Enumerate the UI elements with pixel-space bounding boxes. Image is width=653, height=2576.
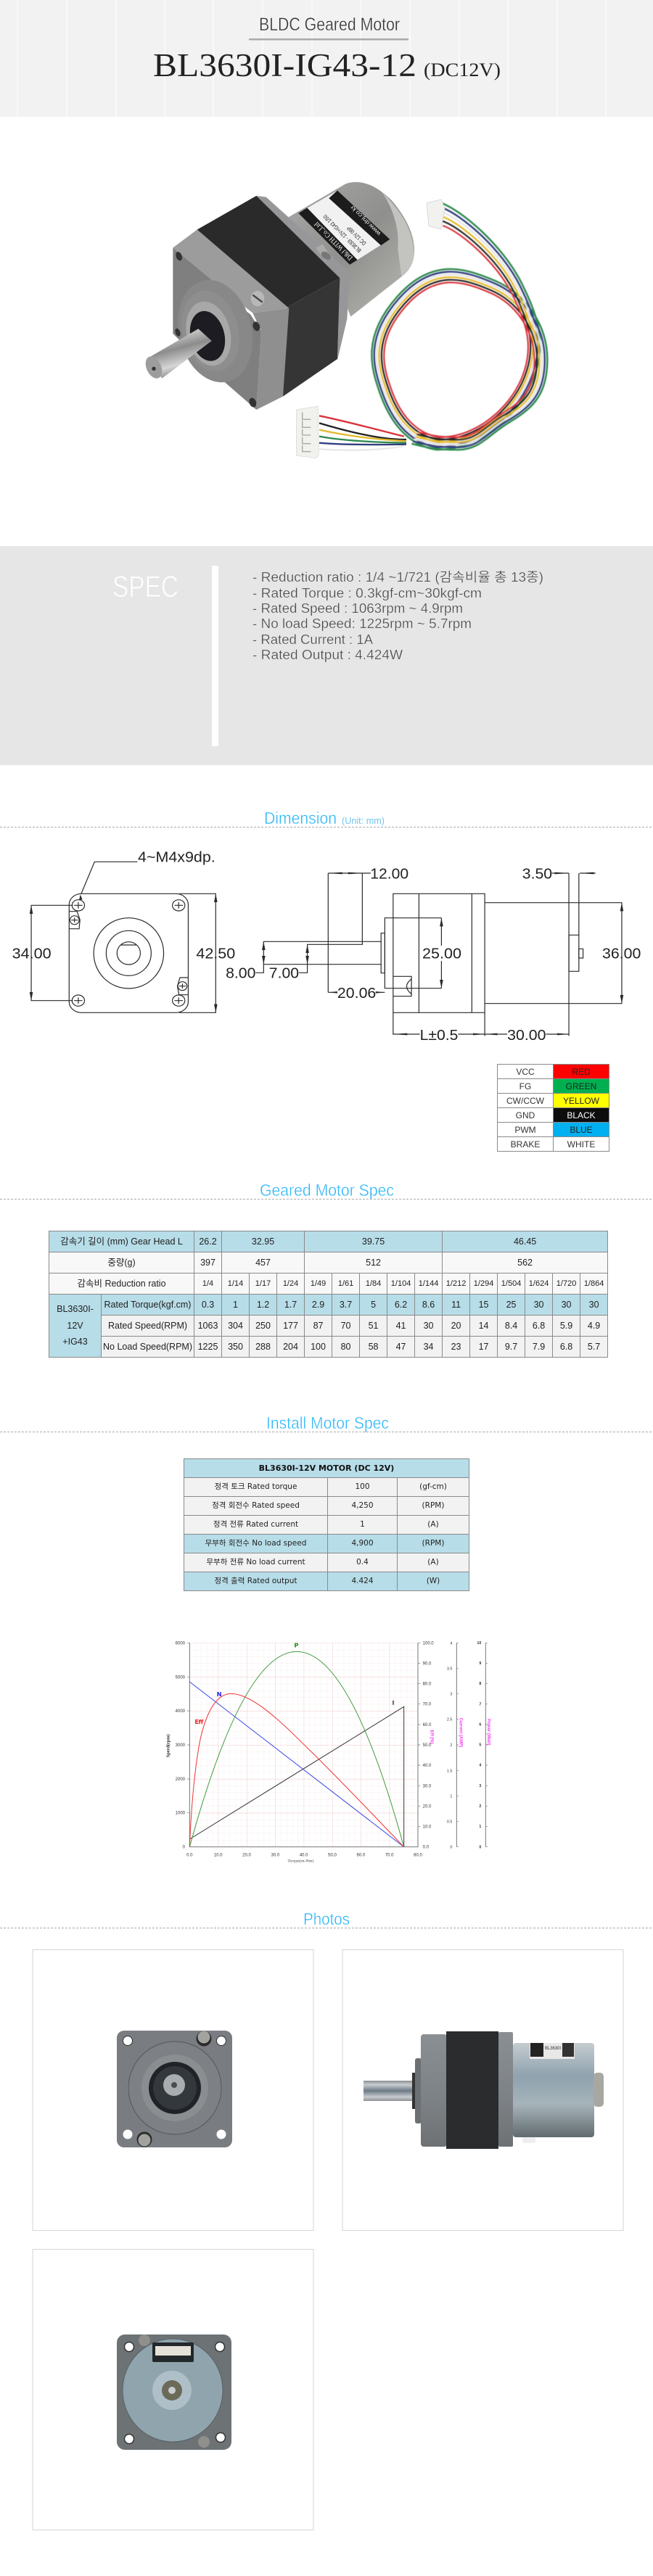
install motor spec table xyxy=(184,1458,469,1591)
geared motor spec table: 1/49 xyxy=(311,1279,326,1288)
geared motor spec table: Rated Speed(RPM) xyxy=(108,1321,187,1331)
efficiency axis labels: 0.0 xyxy=(423,1846,430,1850)
efficiency axis labels: 40.0 xyxy=(423,1764,432,1768)
current axis labels xyxy=(447,1641,452,1850)
power axis labels: 5 xyxy=(479,1743,481,1748)
geared motor spec table: 11 xyxy=(451,1300,461,1310)
hero photo: geared motor with cable xyxy=(142,182,547,458)
current axis labels: 0 xyxy=(450,1846,452,1850)
geared motor spec table xyxy=(49,1231,608,1358)
geared motor spec table: 1/504 xyxy=(501,1279,521,1288)
efficiency axis labels: 100.0 xyxy=(423,1641,434,1646)
curve labels: P xyxy=(294,1641,298,1648)
geared motor spec table: 23 xyxy=(451,1342,461,1352)
geared motor spec table: 감속기 길이 (mm) Gear Head L xyxy=(60,1237,183,1247)
geared motor spec table: 5.9 xyxy=(560,1321,572,1331)
geared motor spec table: 304 xyxy=(228,1321,243,1331)
dim 34.00: 34.00 xyxy=(12,946,52,962)
spec divider bar xyxy=(212,566,218,746)
wire colour table: WHITE xyxy=(567,1139,595,1149)
geared motor spec table: 80 xyxy=(341,1342,351,1352)
efficiency axis labels: 80.0 xyxy=(423,1683,432,1687)
install motor spec table: BL3630I-12V MOTOR (DC 12V) xyxy=(259,1464,394,1473)
power axis labels: 4 xyxy=(479,1764,481,1768)
geared motor spec table: 350 xyxy=(228,1342,243,1352)
rating label: D&J WITH Co.,Ltd xyxy=(313,220,355,262)
geared motor spec table: 15 xyxy=(479,1300,489,1310)
geared motor spec table: 1.7 xyxy=(284,1300,297,1310)
geared motor spec table: 1/14 xyxy=(228,1279,243,1288)
efficiency axis labels xyxy=(423,1641,434,1850)
geared motor spec table: 1/212 xyxy=(446,1279,466,1288)
motor body, drawn in crop coordinates xyxy=(142,182,414,410)
heading: dimension: (Unit: mm) xyxy=(342,815,385,826)
efficiency axis labels: 10.0 xyxy=(423,1825,432,1830)
spec list: - Reduction ratio : 1/4 ~1/721 (감속비율 총 13종) xyxy=(252,570,543,585)
install motor spec table: 정격 전류 Rated current xyxy=(213,1520,298,1529)
speed axis labels: 1000 xyxy=(176,1812,186,1816)
power axis labels: 8 xyxy=(479,1682,481,1686)
geared motor spec table: 1/144 xyxy=(419,1279,438,1288)
geared motor spec table: 1063 xyxy=(198,1321,218,1331)
install motor spec table: 100 xyxy=(355,1482,370,1491)
efficiency axis labels: 60.0 xyxy=(423,1723,432,1727)
heading: dimension: Dimension xyxy=(264,809,337,827)
dim 8.00: 8.00 xyxy=(226,965,255,982)
torque axis labels: 20.0 xyxy=(242,1853,251,1857)
heading: photos: Photos xyxy=(303,1910,350,1928)
curve: power xyxy=(189,1651,404,1847)
spec list: - No load Speed: 1225rpm ~ 5.7rpm xyxy=(252,616,472,631)
wire colour table: VCC xyxy=(516,1066,535,1076)
curve: current xyxy=(189,1706,404,1847)
geared motor spec table: 39.75 xyxy=(362,1237,385,1247)
geared motor spec table: 204 xyxy=(283,1342,298,1352)
axis titles xyxy=(166,1718,490,1757)
geared motor spec table: 25 xyxy=(506,1300,517,1310)
efficiency axis labels: 20.0 xyxy=(423,1804,432,1809)
current axis labels: 1.5 xyxy=(447,1769,452,1773)
geared motor spec table: 288 xyxy=(255,1342,271,1352)
power axis labels: 2 xyxy=(479,1804,481,1809)
power axis labels: 1 xyxy=(479,1825,481,1829)
axis titles: Power (Watt) xyxy=(486,1719,490,1746)
torque axis labels: 10.0 xyxy=(214,1853,223,1857)
geared motor spec table: 7.9 xyxy=(533,1342,545,1352)
geared motor spec table: 30 xyxy=(534,1300,544,1310)
geared motor spec table: 562 xyxy=(517,1258,533,1268)
install motor spec table: 4.424 xyxy=(351,1577,374,1585)
install motor spec table: 1 xyxy=(360,1520,365,1529)
leader label: 4~M4x9dp. xyxy=(138,849,215,865)
torque axis labels: 30.0 xyxy=(271,1853,280,1857)
power axis labels: 9 xyxy=(479,1661,481,1666)
geared motor spec table: No Load Speed(RPM) xyxy=(103,1342,192,1352)
install motor spec table: (gf-cm) xyxy=(419,1482,447,1491)
geared motor spec table: 14 xyxy=(479,1321,489,1331)
power axis labels: 7 xyxy=(479,1702,481,1706)
geared motor spec table: 1.2 xyxy=(257,1300,269,1310)
axis titles: Current (AMP) xyxy=(458,1718,462,1747)
power axis labels: 0 xyxy=(479,1845,481,1849)
dim 25.00: 25.00 xyxy=(422,946,461,962)
dim 3.50: 3.50 xyxy=(522,866,552,883)
current axis labels: 2 xyxy=(450,1743,452,1748)
geared motor spec table: 5.7 xyxy=(588,1342,600,1352)
install motor spec table: 무부하 회전수 No load speed xyxy=(205,1539,306,1548)
dim 7.00: 7.00 xyxy=(269,965,299,982)
performance chart xyxy=(166,1641,490,1863)
wire colour table: RED xyxy=(572,1066,591,1076)
geared motor spec table: 26.2 xyxy=(199,1237,217,1247)
efficiency axis labels: 70.0 xyxy=(423,1703,432,1707)
title xyxy=(153,47,501,83)
title: BL3630I-IG43-12 xyxy=(153,47,416,83)
wire colour table: GND xyxy=(516,1110,535,1120)
power axis labels: 3 xyxy=(479,1784,481,1788)
axis titles: Eff (%) xyxy=(429,1730,433,1743)
torque axis labels: 40.0 xyxy=(300,1853,308,1857)
geared motor spec table: 46.45 xyxy=(514,1237,536,1247)
geared motor spec table: Rated Torque(kgf.cm) xyxy=(104,1300,191,1310)
speed axis labels: 2000 xyxy=(176,1778,186,1782)
wire colour table: FG xyxy=(519,1081,531,1091)
install motor spec table: (A) xyxy=(427,1558,439,1566)
torque axis labels: 80.0 xyxy=(414,1853,422,1857)
current axis labels: 0.5 xyxy=(447,1820,452,1825)
geared motor spec table: 58 xyxy=(369,1342,379,1352)
geared motor spec table: 177 xyxy=(283,1321,298,1331)
power axis labels: 10 xyxy=(477,1641,481,1646)
heading: geared motor spec: Geared Motor Spec xyxy=(260,1181,394,1200)
install motor spec table: (A) xyxy=(427,1520,439,1529)
geared motor spec table: 51 xyxy=(369,1321,379,1331)
current axis labels: 3 xyxy=(450,1693,452,1697)
geared motor spec table: 12V xyxy=(67,1321,83,1331)
spec list: - Rated Current : 1A xyxy=(252,632,373,647)
power axis labels: 6 xyxy=(479,1722,481,1727)
bottom connector and leads xyxy=(296,406,406,458)
geared motor spec table: 17 xyxy=(479,1342,489,1352)
install motor spec table: (RPM) xyxy=(422,1501,444,1510)
geared motor spec table: 0.3 xyxy=(202,1300,214,1310)
curve labels: Eff xyxy=(194,1718,204,1725)
install motor spec table: 4,900 xyxy=(351,1539,374,1548)
spec list: - Rated Torque : 0.3kgf-cm~30kgf-cm xyxy=(252,586,482,600)
efficiency axis labels: 50.0 xyxy=(423,1743,432,1748)
curve labels: N xyxy=(217,1690,222,1698)
spec heading: SPEC xyxy=(112,569,178,603)
speed axis labels: 5000 xyxy=(176,1675,186,1680)
install motor spec table: 4,250 xyxy=(351,1501,374,1510)
heading: dimension xyxy=(264,809,385,827)
geared motor spec table: +IG43 xyxy=(62,1337,88,1347)
geared motor spec table: 1/720 xyxy=(557,1279,576,1288)
geared motor spec table: 1/104 xyxy=(391,1279,411,1288)
heading: install motor spec: Install Motor Spec xyxy=(266,1413,389,1432)
current axis labels: 4 xyxy=(450,1641,452,1646)
title: (DC12V) xyxy=(424,59,501,80)
subtitle rule xyxy=(249,38,408,41)
install motor spec table: 정격 출력 Rated output xyxy=(214,1577,297,1585)
geared motor spec table: 감속비 Reduction ratio xyxy=(77,1279,166,1289)
install motor spec table: 정격 토크 Rated torque xyxy=(215,1482,297,1491)
panel: spec xyxy=(0,546,653,765)
efficiency axis labels: 30.0 xyxy=(423,1784,432,1788)
geared motor spec table: 100 xyxy=(311,1342,326,1352)
photo panel: side view: BL3630I xyxy=(545,2047,561,2051)
geared motor spec table: 5 xyxy=(371,1300,376,1310)
geared motor spec table: 397 xyxy=(200,1258,215,1268)
current axis labels: 3.5 xyxy=(447,1667,452,1671)
torque axis labels: 50.0 xyxy=(328,1853,337,1857)
geared motor spec table: 1 xyxy=(233,1300,238,1310)
wire colour table: BLUE xyxy=(570,1124,593,1134)
rating label xyxy=(298,191,390,265)
wire colour table: BLACK xyxy=(567,1110,596,1120)
geared motor spec table: 6.2 xyxy=(395,1300,407,1310)
speed axis labels: 0 xyxy=(183,1846,186,1850)
geared motor spec table: 2.9 xyxy=(312,1300,324,1310)
geared motor spec table: 47 xyxy=(396,1342,406,1352)
geared motor spec table: 4.9 xyxy=(588,1321,600,1331)
curve labels: I xyxy=(392,1699,395,1706)
power axis labels xyxy=(477,1641,481,1849)
geared motor spec table: 30 xyxy=(562,1300,572,1310)
geared motor spec table: 6.8 xyxy=(533,1321,545,1331)
curve: speed xyxy=(189,1682,404,1847)
torque axis labels xyxy=(186,1853,422,1863)
speed axis labels: 6000 xyxy=(176,1641,186,1646)
torque axis labels: 60.0 xyxy=(357,1853,366,1857)
current axis labels: 1 xyxy=(450,1795,452,1799)
wire colour table: PWM xyxy=(514,1124,536,1134)
dim 42.50: 42.50 xyxy=(196,946,235,962)
speed axis labels: 3000 xyxy=(176,1743,186,1748)
geared motor spec table: 8.6 xyxy=(422,1300,435,1310)
torque axis labels: Torque(m-Nm) xyxy=(287,1858,313,1863)
geared motor spec table: 중량(g) xyxy=(107,1258,136,1268)
dim L±0.5: L±0.5 xyxy=(420,1027,458,1044)
photo panel: front view xyxy=(33,1949,313,2231)
rating label: DC 12V 06P xyxy=(345,225,367,247)
dimension drawing xyxy=(12,849,641,1044)
efficiency axis labels: 90.0 xyxy=(423,1661,432,1666)
install motor spec table: (RPM) xyxy=(422,1539,444,1548)
front view xyxy=(30,862,218,1012)
dim 30.00: 30.00 xyxy=(507,1027,546,1044)
subtitle: BLDC Geared Motor: BLDC Geared Motor xyxy=(259,15,400,35)
geared motor spec table: 87 xyxy=(313,1321,324,1331)
geared motor spec table: 1225 xyxy=(198,1342,218,1352)
photo panel: rear view xyxy=(33,2250,313,2530)
geared motor spec table: 3.7 xyxy=(340,1300,352,1310)
dim 20.06: 20.06 xyxy=(337,985,376,1002)
torque axis labels: 0.0 xyxy=(186,1853,193,1857)
wire colour table: GREEN xyxy=(566,1081,596,1091)
dim 12.00: 12.00 xyxy=(370,866,408,883)
geared motor spec table: 1/4 xyxy=(202,1279,213,1288)
geared motor spec table: BL3630I- xyxy=(57,1304,94,1314)
wire colour table: BRAKE xyxy=(511,1139,540,1149)
spec list xyxy=(252,570,543,662)
geared motor spec table: 8.4 xyxy=(505,1321,517,1331)
geared motor spec table: 30 xyxy=(589,1300,599,1310)
wiring harness xyxy=(371,203,547,450)
geared motor spec table: 250 xyxy=(255,1321,271,1331)
geared motor spec table: 6.8 xyxy=(560,1342,572,1352)
geared motor spec table: 41 xyxy=(396,1321,406,1331)
install motor spec table: 무부하 전류 No load current xyxy=(206,1558,305,1566)
wire colour table: YELLOW xyxy=(563,1095,599,1105)
geared motor spec table: 34 xyxy=(424,1342,434,1352)
geared motor spec table: 512 xyxy=(366,1258,381,1268)
header band xyxy=(0,0,653,117)
spec list: - Rated Speed : 1063rpm ~ 4.9rpm xyxy=(252,601,463,616)
curve labels xyxy=(194,1641,395,1725)
rating label: www.dnj.co.kr xyxy=(349,204,382,237)
side view xyxy=(255,872,623,1036)
torque axis labels: 70.0 xyxy=(385,1853,394,1857)
axis titles: Speed(rpm) xyxy=(166,1734,171,1757)
wire colour table: CW/CCW xyxy=(506,1095,544,1105)
install motor spec table: (W) xyxy=(427,1577,440,1585)
geared motor spec table: 20 xyxy=(451,1321,461,1331)
geared motor spec table: 70 xyxy=(341,1321,351,1331)
current axis labels: 2.5 xyxy=(447,1718,452,1722)
rating label: BL3630I - 12V+IG43 1/50 xyxy=(322,213,363,254)
spec list: - Rated Output : 4.424W xyxy=(252,648,403,662)
geared motor spec table: 32.95 xyxy=(252,1237,274,1247)
speed axis labels: 4000 xyxy=(176,1709,186,1714)
speed axis labels xyxy=(176,1641,186,1850)
install motor spec table: 정격 회전수 Rated speed xyxy=(212,1501,300,1510)
geared motor spec table: 1/24 xyxy=(283,1279,298,1288)
install motor spec table: 0.4 xyxy=(356,1558,369,1566)
geared motor spec table: 1/61 xyxy=(338,1279,353,1288)
geared motor spec table: 1/624 xyxy=(529,1279,549,1288)
geared motor spec table: 1/864 xyxy=(584,1279,604,1288)
wire colour table xyxy=(497,1064,609,1152)
geared motor spec table: 1/17 xyxy=(255,1279,271,1288)
geared motor spec table: 1/84 xyxy=(366,1279,381,1288)
geared motor spec table: 30 xyxy=(424,1321,434,1331)
top connector xyxy=(427,199,445,229)
geared motor spec table: 9.7 xyxy=(505,1342,517,1352)
photo panel: side view xyxy=(342,1949,623,2231)
geared motor spec table: 457 xyxy=(255,1258,271,1268)
curve: efficiency xyxy=(189,1693,404,1847)
geared motor spec table: 1/294 xyxy=(474,1279,493,1288)
